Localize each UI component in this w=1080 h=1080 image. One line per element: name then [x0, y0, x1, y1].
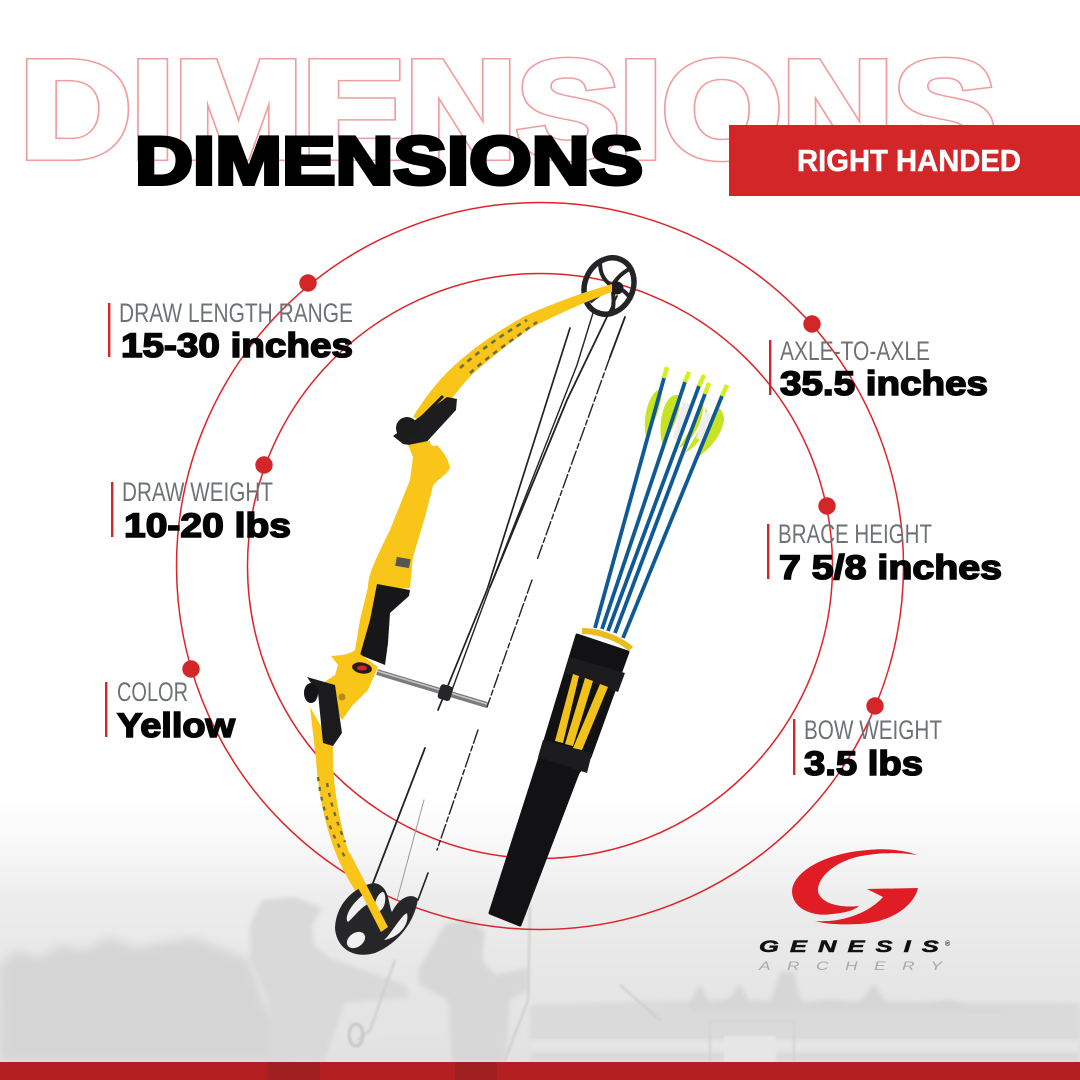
lower limb pocket [307, 677, 342, 746]
spec: axle-to-axle: 35.5 inches [780, 365, 988, 403]
lower limb [310, 707, 388, 932]
upper limb [413, 284, 612, 428]
spec: brace height: 7 5/8 inches [779, 549, 1002, 587]
spec: bow weight [793, 715, 942, 783]
lower cam wheel [335, 883, 418, 955]
spec: axle-to-axle [769, 336, 988, 403]
arrows [595, 367, 727, 638]
riser mounting plate [395, 557, 411, 568]
spec: brace height [767, 519, 1002, 587]
spec: draw weight [111, 477, 291, 545]
upper limb pocket [393, 397, 457, 447]
logo: Genesis Archery: ® [945, 940, 951, 948]
spec: color: COLOR [117, 677, 188, 707]
spec: brace height: BRACE HEIGHT [778, 519, 932, 549]
spec: draw weight: 10-20 lbs [124, 507, 291, 545]
spec: bow weight: 3.5 lbs [804, 745, 923, 783]
bow strings [373, 296, 625, 900]
spec: draw length range: 15-30 inches [121, 327, 353, 365]
bottom red bar [0, 1062, 1080, 1080]
silhouette: left archer [250, 897, 410, 1062]
spec: bow weight: BOW WEIGHT [804, 715, 942, 745]
lower strap [538, 740, 592, 773]
badge: right handed: RIGHT HANDED [797, 143, 1021, 178]
background title outline: DIMENSIONS [20, 33, 996, 187]
limb draw-length markings [460, 320, 537, 373]
lower limb markings [318, 777, 345, 857]
logo: Genesis Archery: GENESIS [759, 937, 940, 956]
black grip [360, 584, 410, 665]
title: DIMENSIONS [135, 123, 643, 199]
fletching [645, 389, 724, 457]
yellow strips [555, 674, 608, 750]
background title outline: DIMENSIONS [20, 33, 996, 187]
outer ring [176, 202, 904, 930]
logo: Genesis Archery: ARCHERY [758, 961, 943, 973]
quiver rim [582, 631, 631, 649]
logo: Genesis Archery [758, 849, 951, 973]
spec: color: Yellow [117, 707, 235, 745]
spec: draw length range [108, 298, 353, 365]
foggy archery background photo [0, 800, 1080, 1062]
silhouette: right archer [418, 920, 528, 1062]
upper cam wheel [575, 250, 643, 322]
stabilizer rod [377, 671, 487, 705]
arrow labels [673, 402, 690, 440]
badge: right handed [729, 125, 1080, 196]
quiver tube [490, 635, 628, 925]
inner ring [248, 274, 832, 858]
nocks [664, 367, 727, 396]
archery target [710, 1021, 794, 1062]
arrow shafts [595, 378, 722, 638]
riser [345, 440, 450, 657]
spec: color [105, 677, 235, 745]
bow [304, 250, 643, 955]
ring markers [182, 274, 884, 715]
lower riser [323, 651, 378, 720]
spec: axle-to-axle: AXLE-TO-AXLE [780, 336, 930, 366]
quiver [490, 631, 631, 925]
spec: draw length range: DRAW LENGTH RANGE [119, 298, 353, 328]
upper strap [565, 657, 625, 692]
spec: draw weight: DRAW WEIGHT [122, 477, 273, 507]
